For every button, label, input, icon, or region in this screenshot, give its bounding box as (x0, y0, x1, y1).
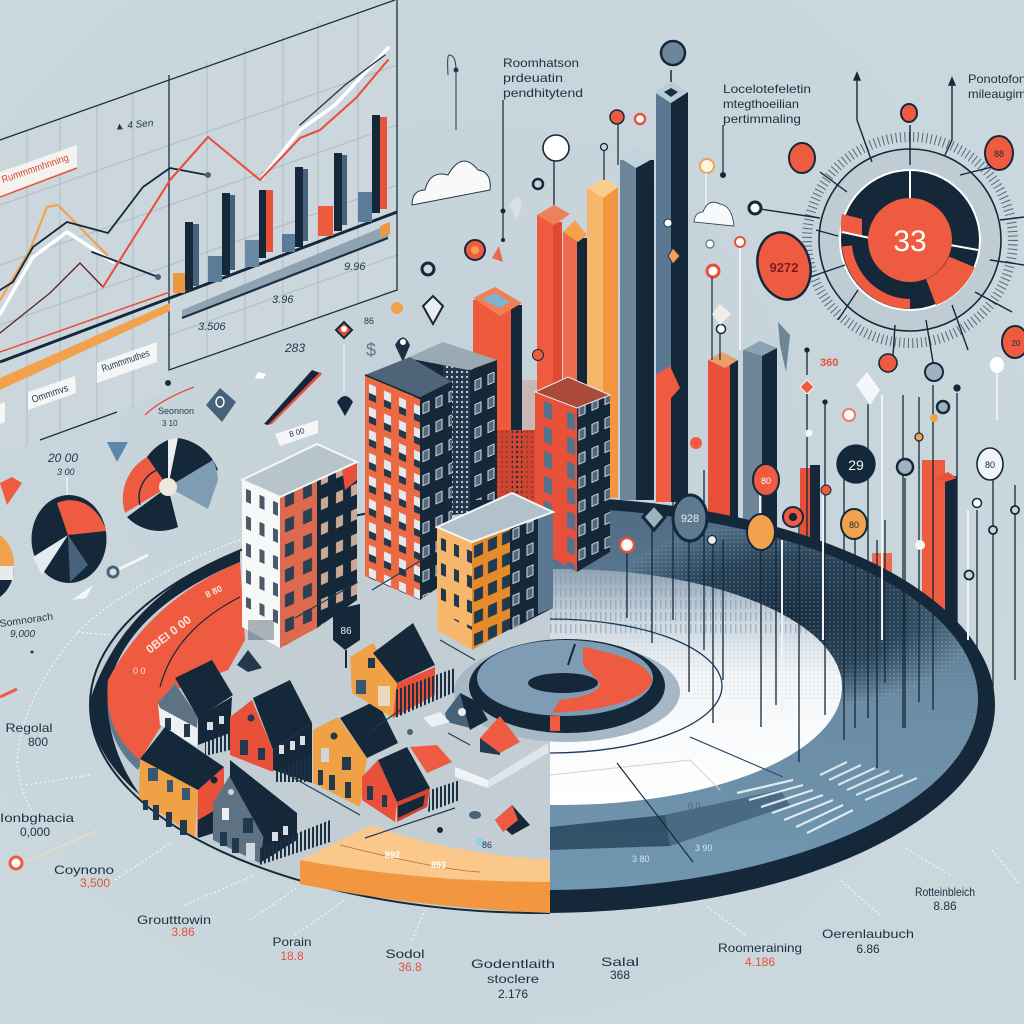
street line (283, 555, 475, 838)
pin labels: 29 (848, 457, 864, 473)
icon: cloud left (412, 161, 490, 205)
pin labels: 928 (681, 513, 699, 525)
bottom labels: Oerenlaubuch (822, 927, 914, 941)
gauge chart: 9272 (770, 260, 798, 275)
small icons under the chart (145, 302, 410, 428)
far bars on the right (708, 341, 957, 636)
pie: left (32, 477, 106, 583)
bottom labels: stoclere (487, 972, 539, 986)
bottom labels: Coynono (54, 863, 114, 877)
pin labels: 80 (849, 520, 859, 530)
icon: triangle (107, 442, 128, 462)
pie charts left: 9,000 (10, 629, 35, 640)
house: upper red (230, 680, 312, 783)
disk base: 893 (431, 860, 446, 870)
small labels: 20 00 (47, 451, 78, 465)
icon: key (108, 555, 148, 577)
bottom labels (0, 721, 975, 1001)
heading: left: pendhitytend (503, 86, 583, 100)
chart labels: 3.96 (272, 294, 294, 306)
small icons under the chart: $ (366, 340, 376, 360)
heading: left: prdeuatin (503, 71, 563, 85)
pie: fan (123, 438, 218, 531)
heading: right: Ponotofon (968, 72, 1024, 86)
building: orange and dark (437, 493, 553, 650)
gauge chart (750, 73, 1024, 420)
heading: right (968, 72, 1024, 101)
red arc (107, 562, 245, 760)
disk: right half: 3 90 (695, 843, 713, 853)
dark band (550, 790, 790, 850)
bottom labels: 3.86 (171, 925, 195, 939)
bottom labels: 6.86 (856, 942, 880, 956)
chart labels: 3.506 (198, 321, 226, 333)
disk: right half: 3 80 (632, 854, 650, 864)
gauge chart: 88 (994, 149, 1004, 159)
orange segment (300, 825, 550, 882)
house: upper grey and white (158, 660, 233, 747)
ring line around donut (550, 618, 723, 754)
disk base: 0 0 (133, 666, 146, 676)
chart labels: 86 (364, 316, 374, 326)
small buildings near donut: 86 (482, 840, 492, 850)
sign on the roof (275, 420, 318, 446)
bottom labels: 4.186 (745, 955, 775, 969)
small icons under the chart: 3 10 (162, 419, 178, 428)
house: small red (362, 745, 460, 822)
pin: tall left (448, 55, 456, 130)
heading: left: Roomhatson (503, 56, 579, 70)
building: tall red and dark (365, 357, 452, 600)
disk base: 892 (385, 850, 400, 860)
disk: right half (550, 499, 995, 913)
building: red rear right (535, 377, 610, 572)
gauge centre (868, 198, 952, 282)
bars (173, 115, 387, 293)
gauge spokes (760, 73, 1024, 372)
pie charts left: Somnorach (0, 612, 54, 630)
small buildings near donut (237, 650, 548, 850)
house: front left orange (139, 727, 224, 838)
house: front grey (213, 760, 330, 865)
heading: centre: pertimmaling (723, 112, 801, 126)
bottom labels: Groutttowin (137, 913, 211, 927)
pin labels (681, 457, 995, 530)
gauge chart: 20 (1012, 339, 1021, 348)
white stripes block B (820, 762, 917, 800)
bottom labels: Regolal (6, 721, 53, 735)
bottom labels: Salal (601, 955, 639, 969)
icon: cloud right (694, 202, 734, 226)
bottom labels: Roomeraining (718, 941, 802, 955)
bottom labels: 368 (610, 968, 630, 982)
headings and pins above the bars (412, 55, 1024, 372)
bottom labels: Godentlaith (471, 957, 555, 971)
chart labels: 283 (284, 341, 305, 355)
bottom labels: 0,000 (20, 825, 50, 839)
chart labels: ▲ 4 Sen (114, 118, 154, 133)
heading: centre: mtegthoeilian (723, 97, 799, 111)
bottom labels: 3,500 (80, 876, 110, 890)
dotted leader lines (17, 540, 1020, 940)
gauge satellites (789, 143, 815, 173)
heading: left (503, 56, 583, 100)
segments lines (550, 737, 783, 790)
chart labels: Rummmmhnning (0, 153, 70, 186)
lines (0, 48, 388, 333)
chart labels: Ommmvs (30, 383, 70, 406)
icon: pin (0, 477, 22, 505)
tall bars (473, 41, 688, 510)
disk: right half: 0 0 (688, 801, 701, 811)
central donut (454, 639, 680, 742)
bottom labels: 36.8 (398, 960, 422, 974)
house: upper orange (350, 623, 455, 718)
pie charts left (0, 438, 218, 654)
vertical pins (620, 348, 1019, 768)
bottom labels: 2.176 (498, 987, 528, 1001)
building: white, red and dark: 8 00 (288, 426, 306, 439)
house: orange (313, 700, 398, 807)
disk: left half (89, 512, 550, 914)
gauge chart: 33 (893, 225, 927, 258)
heading: right: mileaugim (968, 87, 1024, 101)
bottom labels: Sodol (386, 947, 424, 961)
bottom labels: Porain (272, 935, 312, 949)
icon: pie part left edge (0, 533, 14, 603)
leader: orange pin (0, 689, 98, 869)
houses (139, 555, 475, 865)
pin labels: 80 (761, 476, 771, 486)
chart labels: 9.96 (344, 261, 366, 273)
small fence (205, 732, 230, 756)
heading: centre (723, 82, 811, 126)
chart base strip (0, 212, 397, 390)
pin labels: 80 (985, 460, 995, 470)
building: dark rear tower (407, 342, 537, 520)
heading: centre: Locelotefeletin (723, 82, 811, 96)
disk base (90, 497, 996, 913)
bottom labels: Rotteinbleich (915, 885, 975, 899)
pie charts left: 3 00 (57, 467, 75, 477)
bottom labels: 800 (28, 735, 48, 749)
bottom labels: Ionbghacia (0, 811, 74, 825)
disk base: 8 80 (204, 583, 224, 600)
street sign (333, 604, 360, 668)
panel: line and bar chart (0, 0, 397, 455)
low wall (455, 743, 548, 788)
white stripes block A (737, 780, 853, 833)
bottom labels: 18.8 (280, 949, 304, 963)
street sign: 86 (340, 626, 352, 637)
disk base: 0BEI 0 00 (143, 612, 194, 656)
building: white, red and dark (242, 420, 357, 648)
chart labels (0, 118, 374, 424)
gauge chart: 360 (820, 357, 838, 369)
bottom labels: 8.86 (933, 899, 957, 913)
white pin lines (760, 395, 968, 713)
small icons under the chart: Seonnon (158, 406, 194, 416)
chart labels: Rummmuthes (100, 348, 151, 375)
